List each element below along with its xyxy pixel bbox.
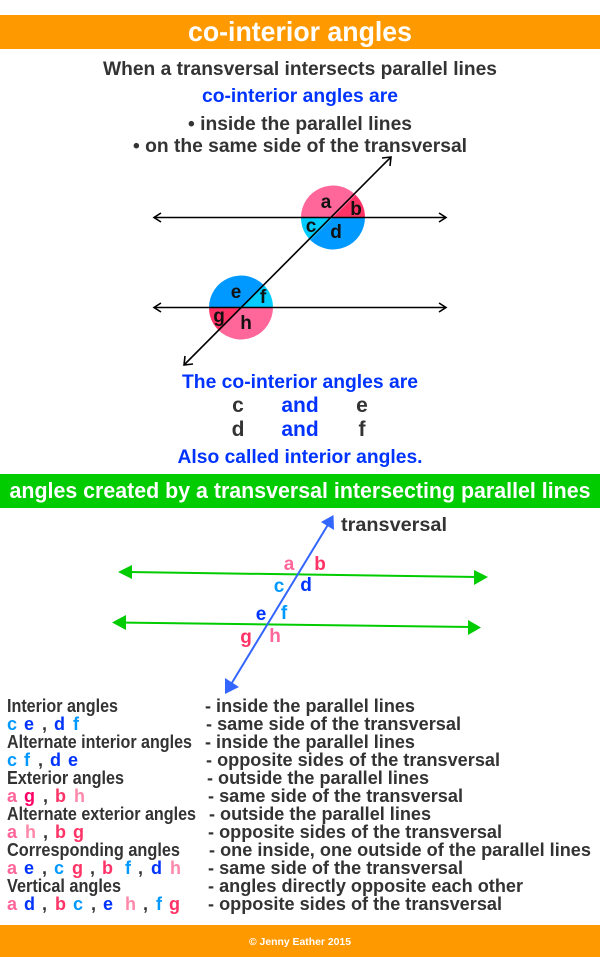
angle pair list [7, 696, 591, 914]
angle letters: h [240, 313, 252, 334]
angle descriptions: - same side of the transversal [206, 714, 461, 734]
angle letters: f [281, 603, 288, 624]
letter pairs: exterior: a [7, 786, 18, 806]
letter pairs: vertical: h [125, 894, 136, 914]
letter pairs: exterior [7, 786, 85, 806]
letter pairs: vertical: g [169, 894, 180, 914]
angle descriptions: - one inside, one outside of the parallel lines [209, 840, 591, 860]
letter pairs: alternate exterior: a [7, 822, 18, 842]
co-interior summary text: The co-interior angles are [182, 372, 418, 393]
circle: lower intersection angles [209, 276, 273, 339]
letter pairs: alternate exterior: g [73, 822, 84, 842]
letter pairs: interior [7, 714, 80, 734]
angle letters: b [314, 554, 326, 575]
letter pairs: corresponding: b [102, 858, 113, 878]
co-interior summary text: and [281, 418, 319, 441]
letter pairs: vertical: c [73, 894, 83, 914]
angle letters: d [300, 575, 312, 596]
letter pairs: interior: , [42, 714, 47, 734]
parallel line lower with arrows [154, 303, 446, 312]
angle letters: a [321, 192, 332, 213]
angle type names: Vertical angles [7, 876, 121, 896]
letter pairs: corresponding: , [90, 858, 95, 878]
letter pairs: corresponding: c [54, 858, 64, 878]
letter pairs: vertical: a [7, 894, 18, 914]
co-interior summary text: e [356, 394, 368, 417]
angle letters: f [260, 287, 267, 308]
intro text block [103, 59, 497, 157]
intro text block: When a transversal intersects parallel lines [103, 59, 497, 80]
letter pairs: vertical: e [103, 894, 113, 914]
intro text block: • on the same side of the transversal [133, 136, 467, 157]
angle letters: d [330, 222, 342, 243]
letter pairs: corresponding: , [138, 858, 143, 878]
letter pairs: alternate interior: , [38, 750, 43, 770]
angle letters: e [256, 604, 266, 625]
title banner: co-interior angles [188, 16, 412, 47]
angle descriptions: - inside the parallel lines [205, 696, 415, 716]
angle letters: e [231, 282, 241, 303]
circle: upper intersection angles [301, 186, 365, 249]
letter pairs: vertical: , [91, 894, 96, 914]
letter pairs: exterior: b [55, 786, 66, 806]
letter pairs: alternate interior: d [50, 750, 61, 770]
co-interior summary text: and [281, 394, 319, 417]
letter pairs: corresponding: a [7, 858, 18, 878]
angle descriptions: - outside the parallel lines [207, 768, 429, 788]
letter pairs: alternate exterior [7, 822, 84, 842]
letter pairs: corresponding: f [125, 858, 132, 878]
angle descriptions: - opposite sides of the transversal [208, 822, 502, 842]
co-interior summary text [178, 372, 422, 468]
letter pairs: vertical: , [143, 894, 148, 914]
letter pairs: vertical: , [42, 894, 47, 914]
letter pairs: corresponding: d [151, 858, 162, 878]
letter pairs: interior: e [24, 714, 34, 734]
angle letters: a [284, 554, 295, 575]
angle type names: Alternate interior angles [7, 732, 192, 752]
letter pairs: alternate interior: e [68, 750, 78, 770]
letter pairs: exterior: , [43, 786, 48, 806]
angle descriptions: - opposite sides of the transversal [208, 894, 502, 914]
angle type names: Alternate exterior angles [7, 804, 196, 824]
letter pairs: alternate exterior: , [43, 822, 48, 842]
angle descriptions: - opposite sides of the transversal [206, 750, 500, 770]
letter pairs: vertical [7, 894, 180, 914]
angle descriptions: - inside the parallel lines [205, 732, 415, 752]
diagram: co-interior angles [154, 157, 446, 365]
letter pairs: alternate interior: c [7, 750, 17, 770]
angle descriptions: - same side of the transversal [208, 858, 463, 878]
letter pairs: interior: f [73, 714, 80, 734]
letter pairs: corresponding [7, 858, 181, 878]
co-interior summary text: c [232, 394, 244, 417]
transversal with arrows [184, 157, 391, 365]
angle letters [240, 554, 326, 648]
angle descriptions: - outside the parallel lines [209, 804, 431, 824]
green parallel line lower [112, 615, 481, 635]
co-interior summary text: d [232, 418, 244, 441]
section banner: angles created by a transversal intersecting parallel lines [10, 478, 590, 503]
angle letters: b [350, 199, 362, 220]
label: transversal: transversal [341, 515, 447, 536]
letter pairs: corresponding: , [42, 858, 47, 878]
letter pairs: vertical: b [55, 894, 66, 914]
angle letters: c [306, 216, 317, 237]
letter pairs: alternate exterior: h [25, 822, 36, 842]
letter pairs: interior: c [7, 714, 17, 734]
letter pairs: alternate interior [7, 750, 78, 770]
letter pairs: corresponding: g [72, 858, 83, 878]
diagram: transversal and parallel lines [112, 515, 488, 694]
letter pairs: vertical: f [156, 894, 163, 914]
letter pairs: interior: d [54, 714, 65, 734]
angle type names: Exterior angles [7, 768, 124, 788]
angle type names: Corresponding angles [7, 840, 180, 860]
angle descriptions: - angles directly opposite each other [208, 876, 523, 896]
letter pairs: corresponding: h [170, 858, 181, 878]
letter pairs: exterior: g [24, 786, 35, 806]
intro text block: • inside the parallel lines [188, 114, 412, 135]
angle letters: g [240, 627, 252, 648]
footer banner [0, 925, 600, 957]
angle letters: g [213, 306, 225, 327]
letter pairs: vertical: d [24, 894, 35, 914]
letter pairs: corresponding: e [24, 858, 34, 878]
angle letters [213, 192, 362, 334]
angle type names: Interior angles [7, 696, 118, 716]
angle type names [7, 696, 196, 896]
angle descriptions [205, 696, 591, 914]
footer banner: © Jenny Eather 2015 [249, 937, 351, 948]
blue transversal [225, 515, 334, 694]
intro text block: co-interior angles are [202, 86, 398, 107]
angle letters: h [269, 626, 281, 647]
letter pairs: alternate exterior: b [55, 822, 66, 842]
angle letters: c [274, 576, 285, 597]
co-interior summary text: f [358, 418, 366, 441]
letter pairs: exterior: h [74, 786, 85, 806]
title banner [0, 15, 600, 49]
parallel line upper with arrows [154, 213, 446, 222]
co-interior summary text: Also called interior angles. [178, 447, 422, 468]
angle descriptions: - same side of the transversal [208, 786, 463, 806]
green parallel line upper [118, 565, 488, 585]
letter pairs: alternate interior: f [24, 750, 31, 770]
